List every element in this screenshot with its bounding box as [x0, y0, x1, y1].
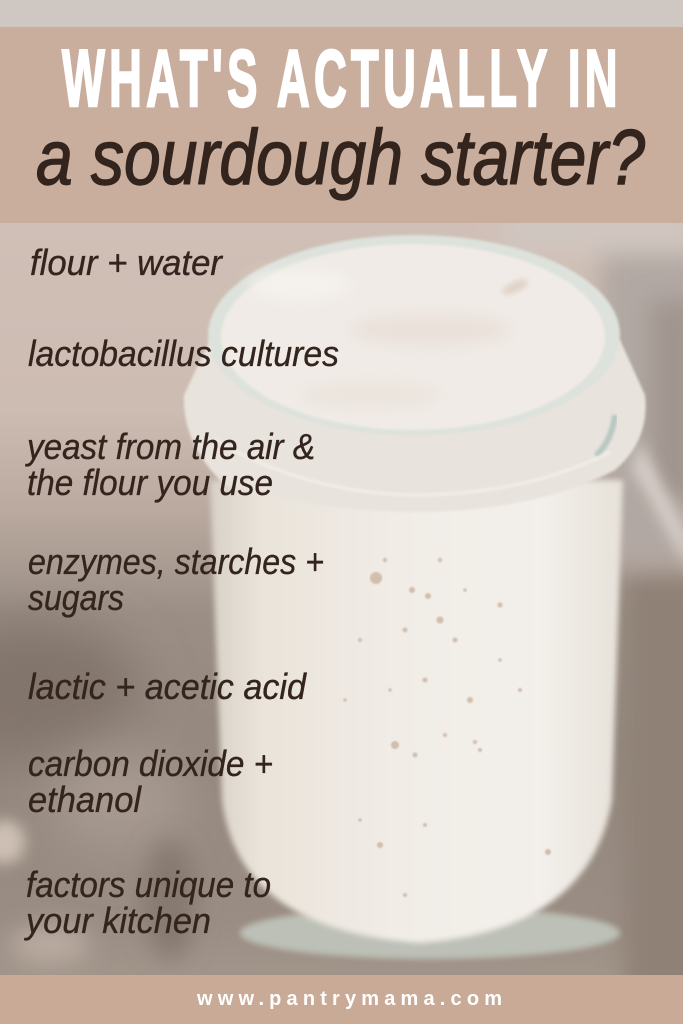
item: yeast: yeast from the air & [24, 426, 315, 467]
item: yeast: the flour you use [27, 462, 273, 503]
bubbles [343, 558, 551, 897]
item: flour + water: flour + water [30, 242, 224, 283]
item: carbon dioxide [28, 743, 273, 820]
item: enzymes: sugars [28, 577, 124, 618]
item: factors: your kitchen [23, 900, 211, 941]
jar body [210, 480, 623, 943]
lip reflections [596, 415, 615, 456]
item: factors: factors unique to [26, 864, 271, 905]
title line 1: WHAT'S ACTUALLY IN [62, 33, 618, 123]
jar base shadow [240, 907, 620, 959]
starter surface [221, 244, 605, 430]
item: acids: lactic + acetic acid [28, 666, 307, 707]
footer band [0, 975, 683, 1024]
ingredient list [23, 242, 339, 941]
item: enzymes: enzymes, starches + [28, 541, 324, 582]
item: yeast [24, 426, 315, 503]
item: enzymes [28, 541, 324, 618]
item: lactobacillus cultures: lactobacillus cultures [28, 333, 339, 374]
top strip [0, 0, 683, 27]
item: carbon dioxide: carbon dioxide + [28, 743, 273, 784]
sourdough jar [184, 235, 646, 959]
glass rim [208, 235, 620, 435]
item: carbon dioxide: ethanol [28, 779, 142, 820]
item: factors [23, 864, 271, 941]
website: www.pantrymama.com [196, 988, 502, 1010]
title band [0, 27, 683, 223]
glass neck lip [184, 340, 646, 512]
